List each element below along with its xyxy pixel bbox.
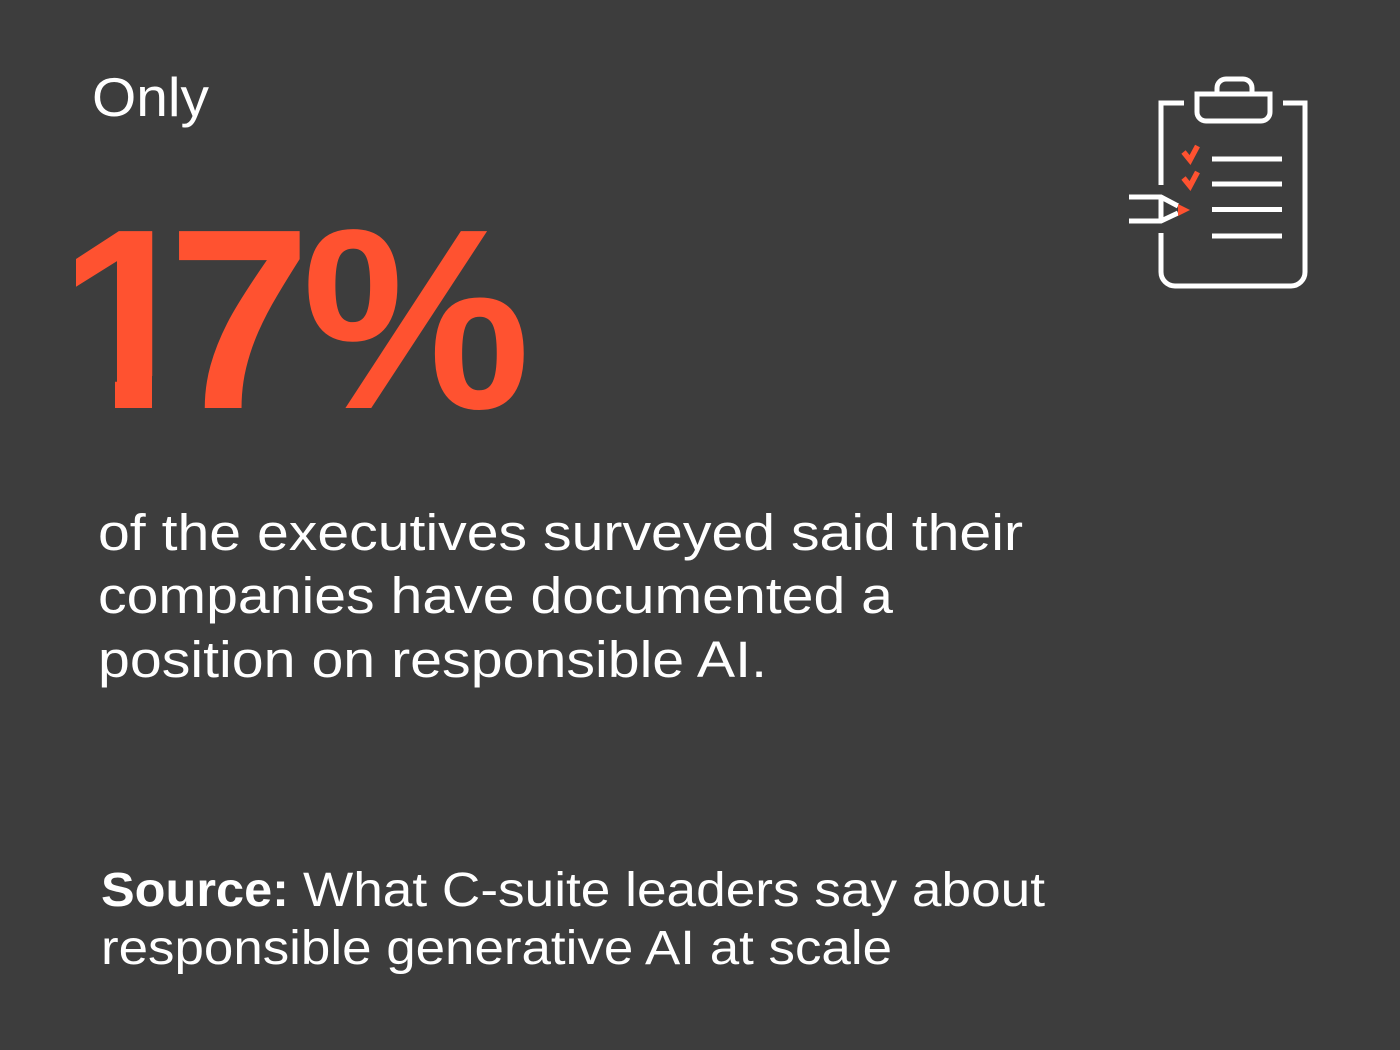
clipboard outline xyxy=(1161,103,1305,286)
body text: of the executives surveyed said their xyxy=(98,504,1023,561)
pencil xyxy=(1129,197,1178,221)
source citation: Source: xyxy=(101,864,289,917)
source citation: responsible generative AI at scale xyxy=(101,922,892,975)
intro word: Only: Only xyxy=(92,66,210,128)
source citation xyxy=(101,864,1045,975)
clipboard clip xyxy=(1197,79,1270,121)
checklist lines xyxy=(1212,159,1282,236)
body text: position on responsible AI. xyxy=(98,631,767,688)
source citation: What C-suite leaders say about xyxy=(303,864,1045,917)
body text: companies have documented a xyxy=(98,567,894,624)
icon: clipboard with checklist and pencil xyxy=(1129,79,1305,286)
body text xyxy=(98,504,1023,688)
pencil tip xyxy=(1178,204,1190,216)
big statistic: 17%: 17% xyxy=(57,176,531,463)
red check marks xyxy=(1184,146,1198,186)
